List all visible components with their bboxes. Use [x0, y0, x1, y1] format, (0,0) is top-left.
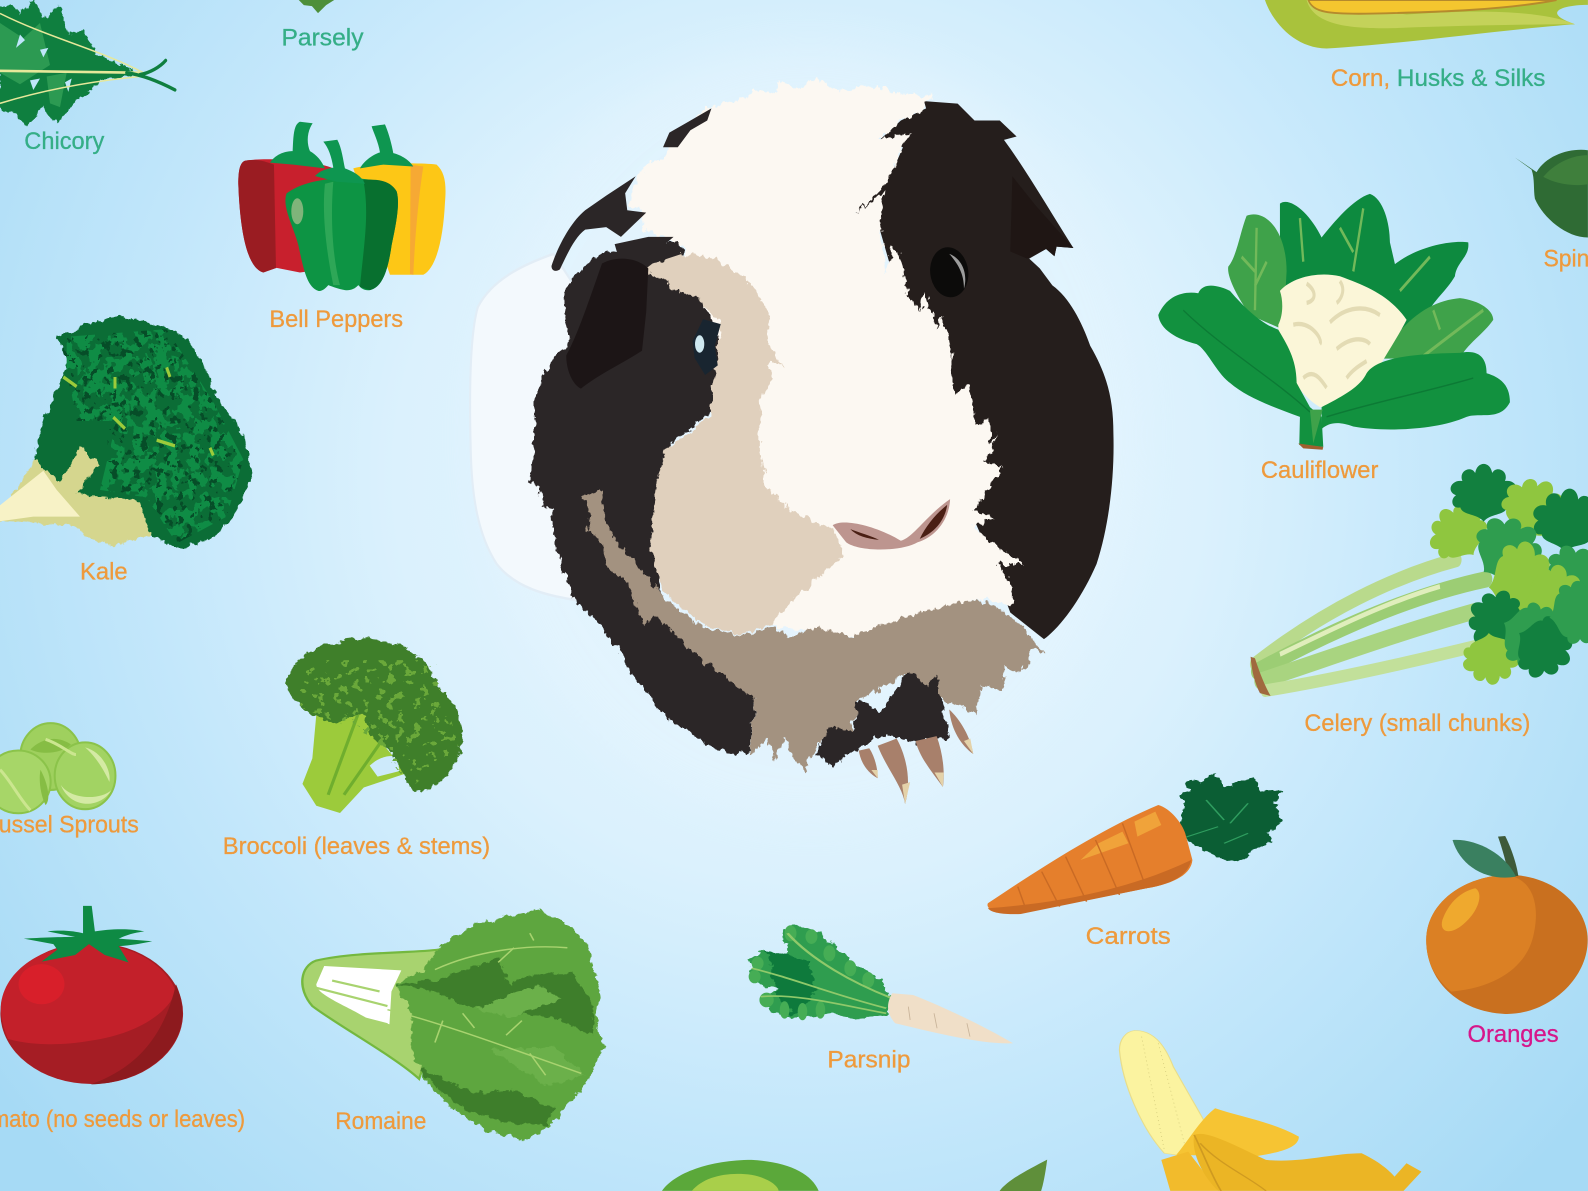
stems	[270, 122, 325, 168]
food: brussel sprouts	[0, 723, 139, 838]
black fur right side	[855, 101, 1114, 639]
carrot tops	[1179, 773, 1283, 862]
icon: parsley sprig	[299, 0, 334, 13]
label: Parsnip	[827, 1046, 910, 1073]
food: tomato	[0, 906, 245, 1133]
food: celery	[1251, 464, 1588, 737]
food: romaine	[302, 910, 603, 1141]
left eye	[692, 319, 721, 375]
icon: celery stalks	[1251, 560, 1502, 696]
label: Parsely	[282, 25, 364, 52]
right eye	[925, 242, 973, 302]
food: cauliflower	[1158, 194, 1510, 484]
food: kale	[0, 316, 252, 585]
guinea pig	[470, 46, 1144, 825]
icon: banana	[1119, 1031, 1421, 1191]
food: broccoli	[223, 638, 490, 860]
food: spinach	[1515, 150, 1588, 272]
icon: corn in husk	[1265, 0, 1588, 48]
back leaves	[1280, 194, 1468, 330]
white body behind head	[470, 254, 648, 600]
mottled highlights	[67, 329, 243, 543]
carrot body	[987, 805, 1192, 914]
soft glow around guinea pig	[476, 46, 1144, 825]
icon: leaf	[1000, 1160, 1047, 1191]
label: Chicory	[24, 128, 105, 155]
food: bell peppers	[238, 122, 446, 333]
icon: celery leaves	[1418, 464, 1588, 689]
food: parsnip	[749, 925, 1013, 1073]
red pepper	[238, 159, 333, 272]
taupe chest fur	[581, 489, 1046, 772]
florets	[287, 638, 463, 793]
dark fur between claws	[817, 671, 949, 768]
black fur left side	[528, 239, 756, 753]
icon: chicory leaves	[0, 0, 175, 126]
label: Kale	[80, 558, 128, 585]
icon: sprouts	[0, 723, 115, 813]
food: leaf at bottom	[1000, 1160, 1047, 1191]
icon: carrot	[987, 773, 1283, 914]
label: Broccoli (leaves & stems)	[223, 833, 490, 860]
rib	[302, 937, 467, 1079]
leaves	[395, 910, 603, 1141]
left ear	[566, 259, 648, 389]
white head fur	[627, 77, 1023, 637]
yellow pepper	[353, 163, 446, 275]
icon: broccoli	[287, 638, 463, 813]
icon: romaine lettuce	[302, 910, 603, 1141]
fur layers	[528, 77, 1046, 772]
label: Bell Peppers	[269, 306, 403, 333]
icon: parsnip	[749, 925, 1013, 1043]
nose	[833, 499, 950, 550]
icon: cauliflower	[1158, 194, 1510, 450]
icon: tomato	[0, 906, 183, 1084]
claws	[859, 709, 973, 804]
label: Romaine	[335, 1108, 426, 1135]
left forelock	[551, 108, 711, 273]
icon: orange	[1426, 836, 1588, 1014]
food: parsely	[282, 0, 364, 52]
food: banana	[1119, 1031, 1421, 1191]
green pepper	[285, 178, 398, 291]
label: Corn, Husks & Silks	[1331, 65, 1545, 92]
icon: peppers	[238, 122, 446, 291]
front leaves	[1158, 286, 1323, 447]
food: carrots	[987, 773, 1283, 950]
label: Carrots	[1086, 923, 1171, 950]
food: corn	[1265, 0, 1588, 92]
cauliflower head	[1278, 274, 1407, 407]
dark leaf mass	[33, 316, 252, 549]
label: Celery (small chunks)	[1304, 710, 1530, 737]
right ear	[1010, 176, 1073, 259]
icon: spinach leaf	[1515, 150, 1588, 238]
pale stems	[0, 410, 150, 545]
label: Cauliflower	[1261, 457, 1378, 484]
calyx	[24, 906, 152, 962]
food: chicory	[0, 0, 175, 155]
icon: kale	[0, 316, 252, 549]
veins	[387, 933, 581, 1075]
food: oranges	[1426, 836, 1588, 1048]
label: Oranges	[1467, 1021, 1559, 1048]
food: cabbage	[662, 1160, 819, 1191]
cream cheek fur	[640, 254, 844, 634]
stem	[302, 711, 407, 813]
light veins	[63, 367, 213, 455]
icon: cabbage top	[662, 1160, 819, 1191]
